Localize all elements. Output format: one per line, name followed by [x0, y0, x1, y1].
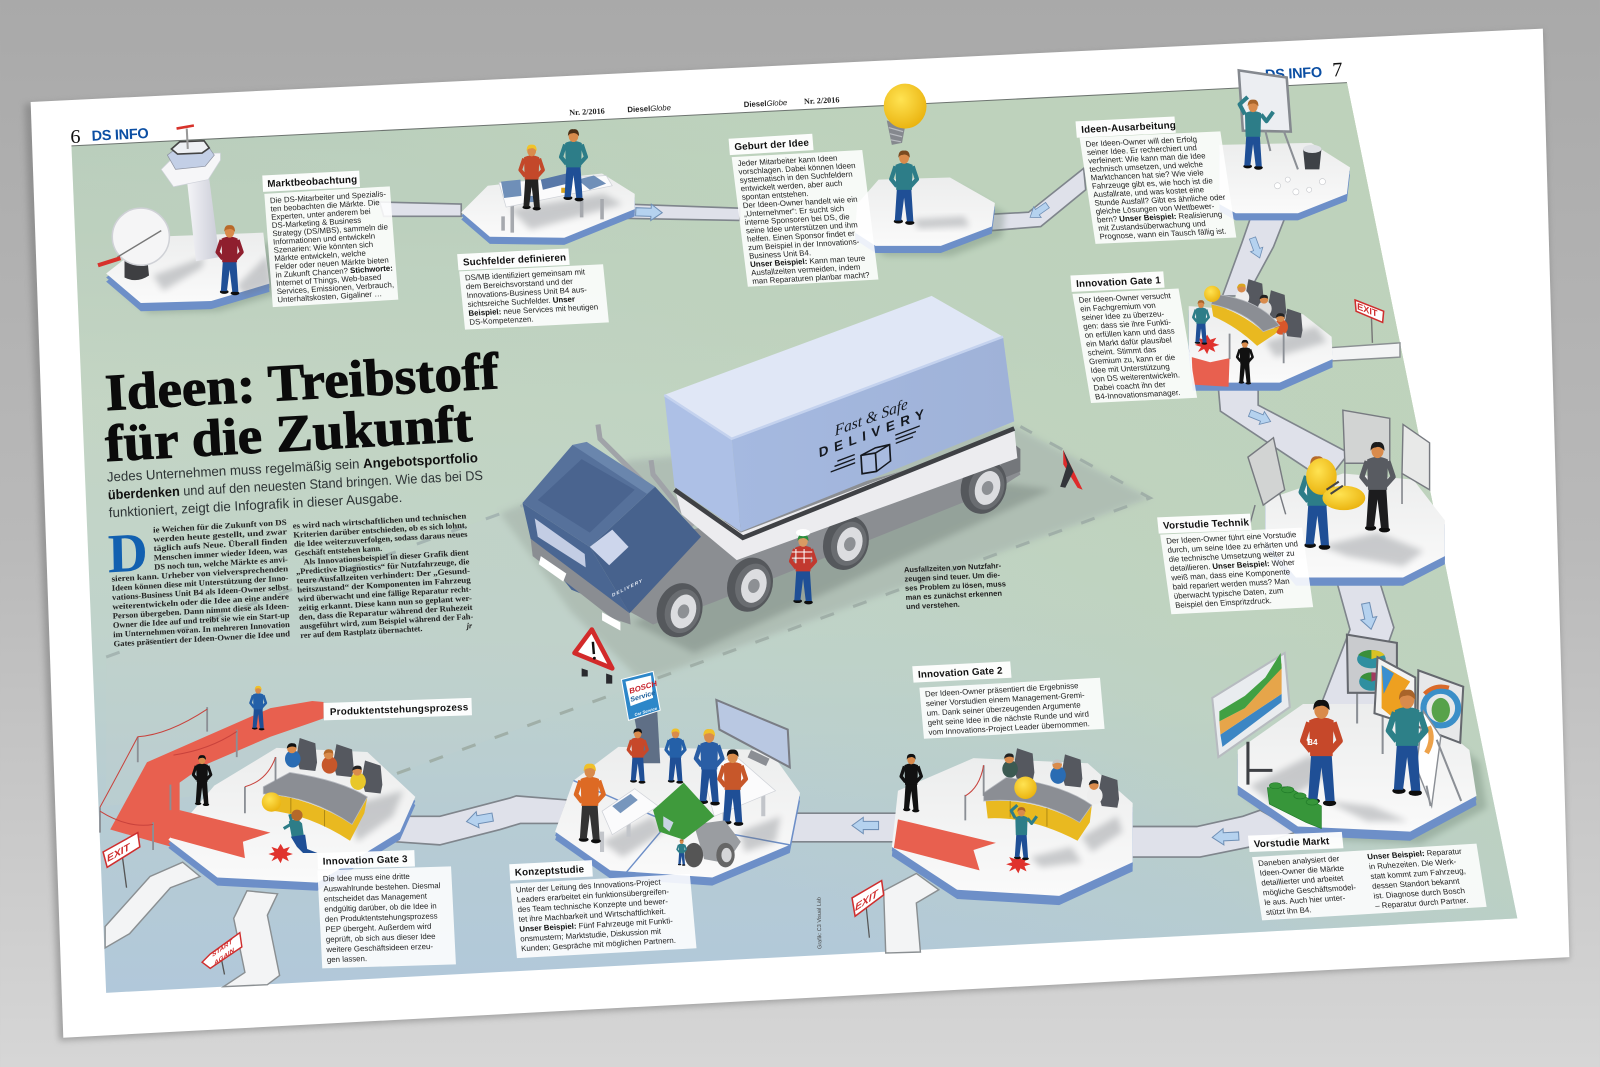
wheels	[650, 454, 1014, 643]
text block: Innovation Gate 1: scheint. Stimmt das	[1087, 345, 1157, 357]
text block: Konzeptstudie: tet ihre Machbarkeit und Wirtschaftlichkeit.	[518, 907, 666, 924]
page header right	[744, 59, 1343, 109]
road: Vorstudie Technik to Markt	[1320, 582, 1394, 706]
concept team	[576, 728, 746, 843]
platform: Vorstudie Markt	[1238, 704, 1487, 844]
text block: Marktbeobachtung: Die DS-Mitarbeiter und Spezialis-	[270, 189, 387, 205]
cargo box	[664, 296, 1014, 532]
text block: Ideen-Ausarbeitung: technisch umsetzen, und welche	[1089, 160, 1204, 174]
text block: Marktbeobachtung: in Zukunft Chancen? Stichworte:	[275, 264, 393, 280]
road: Gate 1 exit	[1327, 343, 1400, 361]
boards Vorstudie Technik	[1248, 410, 1430, 528]
road: Gate 3 exit	[105, 862, 200, 948]
start again sign: AGAIN	[214, 947, 234, 967]
text block: Innovation Gate 1: Dabei coacht ihn der	[1093, 380, 1167, 393]
text block: Ideen-Ausarbeitung: Ausfallrate, und was kostet eine	[1093, 185, 1205, 199]
person on carpet	[250, 686, 266, 730]
platform: Geburt der Idee	[855, 178, 1005, 256]
text block: Marktbeobachtung: Services, Emissionen, Verbrauch,	[276, 280, 394, 296]
text block: Marktbeobachtung: Marktbeobachtung	[267, 175, 358, 190]
text block: Vorstudie Technik: durch, um seine Idee zu erhärten und	[1167, 539, 1299, 555]
text block: Geburt der Idee: Unser Beispiel: Kann man teure	[750, 254, 866, 269]
exit sign Gate 3	[103, 833, 140, 888]
platform: Vorstudie Technik	[1265, 473, 1445, 586]
owner with bulb Gate 2	[1006, 777, 1037, 873]
article column 1: ie Weichen für die Zukunft von DS	[153, 518, 287, 535]
text block: Marktbeobachtung: ten beobachten die Märkte. Die	[270, 198, 381, 214]
kneeling owner with bulb	[262, 792, 317, 863]
page header right: Nr. 2/2016	[804, 95, 840, 106]
text block: Vorstudie Markt	[1248, 832, 1487, 920]
text block: Geburt der Idee: spontan entstehen.	[741, 189, 809, 202]
subheading	[107, 450, 484, 520]
caption near truck: zeugen sind teuer. Um die-	[904, 570, 1001, 584]
text block: Marktbeobachtung: Experten, unter anderem bei	[271, 207, 371, 222]
text block: Innovation Gate 3: gen lassen.	[327, 954, 367, 964]
subheading: überdenken und auf den neuesten Stand bringen. Wie das bei DS	[107, 468, 483, 502]
article column 2: teure Ausfallzeiten verhindert: Der „Gesund-	[296, 566, 471, 585]
start again sign: START	[212, 938, 233, 959]
text block: Innovation Gate 1	[1070, 271, 1197, 403]
text block: Ideen-Ausarbeitung: Prognose, wann ein Tausch fällig ist.	[1099, 227, 1227, 241]
article column 2: ausgeführt wird, zum Beispiel während der Fah-	[299, 612, 474, 631]
light bulb	[884, 84, 927, 145]
white skirt	[674, 429, 1017, 560]
caption near truck	[904, 561, 1007, 611]
text block: Marktbeobachtung: DS-Marketing & Business	[271, 216, 362, 230]
article column 2: rer auf dem Rastplatz übernachtet.	[300, 624, 423, 640]
caption near truck: Ausfallzeiten von Nutzfahr-	[904, 561, 1002, 574]
text block: Ideen-Ausarbeitung: Marktchancen hat sie? Wie viele	[1090, 168, 1205, 182]
page header left: 6	[70, 126, 81, 148]
text block: Vorstudie Technik: Vorstudie Technik	[1163, 517, 1250, 532]
truck shadow	[633, 480, 1051, 653]
text block: Geburt der Idee	[729, 134, 878, 287]
platform: Suchfelder	[461, 173, 635, 245]
text block: Konzeptstudie	[509, 860, 697, 958]
article column 2: es wird nach wirtschaftlichen und technischen	[292, 511, 467, 531]
text block: Suchfelder definieren: dem Bereichsvorstand und der	[465, 277, 574, 291]
text block: Geburt der Idee: Business Unit B4.	[749, 248, 812, 261]
text block: Innovation Gate 3: weitere Geschäftsideen erzeu-	[325, 942, 434, 954]
text block: Vorstudie Markt: dessen Standort bekannt	[1371, 877, 1461, 891]
cab	[522, 442, 701, 631]
label: Produktentstehungsprozess	[323, 698, 472, 720]
article column 2: zeitig erkannt. Diese kann nun so geplant wer-	[298, 594, 473, 613]
article column 2: „Predictive Diagnostics“ für Nutzfahrzeuge, die	[296, 557, 470, 576]
label: Produktentstehungsprozess: Produktentstehungsprozess	[330, 702, 469, 718]
road: Gate 3 start again	[223, 891, 280, 987]
page header left: Nr. 2/2016	[569, 107, 605, 117]
text block: Suchfelder definieren	[457, 249, 609, 330]
platform: Marktbeobachtung	[106, 233, 278, 313]
text block: Innovation Gate 1: seiner Idee zu überzeu-	[1081, 309, 1165, 322]
article column 2: Kriterien darüber entschieden, ob es sich lohnt,	[293, 521, 467, 540]
text block: Geburt der Idee: Der Ideen-Owner handelt wie ein	[742, 195, 858, 210]
text block: Vorstudie Technik: die technische Umsetzung weiter zu	[1168, 549, 1295, 564]
article column 1: vations-Business Unit B4 als Ideen-Owner selbst	[112, 583, 289, 602]
person DS/MB	[561, 129, 586, 201]
ground lot under truck	[106, 427, 1150, 806]
exit sign Gate 2	[852, 881, 884, 938]
table with vehicle models	[499, 173, 612, 233]
article column 1	[110, 518, 291, 649]
text block: Geburt der Idee: systematisch in den Suchfeldern	[739, 170, 853, 185]
text block: Innovation Gate 1: ein Markt dafür plausibel	[1085, 335, 1173, 349]
text block: Suchfelder definieren: DS-Kompetenzen.	[469, 315, 534, 327]
text block: Geburt der Idee: vorschlagen. Dabei können Ideen	[738, 161, 856, 176]
text block: Ideen-Ausarbeitung: seiner Idee. Er recherchiert und	[1086, 143, 1197, 157]
truck	[522, 296, 1051, 653]
illustration background	[71, 83, 1517, 993]
posts and ropes Gate 3	[100, 707, 276, 850]
title: für die Zukunft	[104, 396, 474, 473]
text block: Geburt der Idee: Geburt der Idee	[734, 138, 810, 153]
article column 1: Ideen können diese mit Unterstützung der Inno-	[112, 574, 289, 593]
text block: Marktbeobachtung: Strategy (DS/MBS), sammeln die	[272, 222, 389, 238]
person at flipchart	[1240, 97, 1273, 170]
text block: Marktbeobachtung: Märkte entwickeln, welche	[274, 249, 367, 263]
mechanic	[791, 529, 815, 604]
Bosch Service sign: Car Service	[634, 705, 658, 717]
road: Ausarbeitung to Gate 1	[1222, 216, 1285, 296]
caption near truck: man es zunächst erkennen	[905, 589, 1003, 602]
page header right: DS INFO	[1265, 65, 1323, 84]
text block: Vorstudie Markt: stützt ihn B4.	[1265, 905, 1312, 917]
text block: Vorstudie Technik: bald repariert werden muss? Man	[1172, 577, 1290, 592]
page header left	[70, 103, 672, 148]
road: Marktbeobachtung to Suchfelder	[380, 202, 461, 216]
text block: Ideen-Ausarbeitung	[1075, 116, 1236, 244]
article column 1: DS noch tun, welche Märkte es anvi-	[154, 555, 288, 572]
thinking person	[891, 151, 917, 225]
person at easel	[1389, 690, 1425, 796]
exit sign Gate 1: EXIT	[1357, 301, 1378, 320]
text block: Ideen-Ausarbeitung: Stunde Ausfall? Gibt es ähnliche oder	[1094, 193, 1226, 208]
person B4	[520, 145, 543, 210]
Bosch Service sign	[621, 671, 660, 763]
title: Ideen: Treibstoff	[104, 343, 501, 422]
platform: Innovation Gate 3	[168, 748, 415, 891]
text block: Geburt der Idee: seine Idee unterstützen und ihm	[745, 220, 859, 235]
text block: Ideen-Ausarbeitung: bern? Unser Beispiel: Realisierung	[1096, 210, 1223, 224]
text block: Ideen-Ausarbeitung: Fahrzeuge gibt es, wie hoch ist die	[1091, 176, 1214, 191]
text block: Vorstudie Markt: mögliche Geschäftsmodel-	[1262, 883, 1357, 897]
tables and monitor	[602, 700, 790, 852]
text block: Marktbeobachtung: Szenarien: Wie könnten sich	[273, 240, 373, 255]
delivery logo	[817, 388, 932, 492]
manager Gate 1	[1230, 333, 1284, 385]
satellite dish	[98, 208, 169, 280]
text block: Suchfelder definieren: Innovations-Business Unit B4 aus-	[466, 285, 588, 300]
text block: Innovation Gate 3: den Produktentstehungsprozess	[325, 911, 438, 924]
text block: Innovation Gate 3	[317, 850, 456, 968]
text block: Innovation Gate 3: Innovation Gate 3	[323, 854, 408, 868]
text block: Innovation Gate 1: von DS weiterentwickeln.	[1091, 370, 1181, 384]
text block: Ideen-Ausarbeitung: verfeinert: Wie kann man die Idee	[1088, 151, 1207, 166]
text block: Suchfelder definieren: Suchfelder definieren	[463, 252, 567, 269]
platform: Innovation Gate 1 red arrow	[1192, 357, 1230, 387]
text block: Geburt der Idee: helfen. Einen Sponsor findet er	[746, 229, 856, 244]
text block: Innovation Gate 3: entscheidet das Management	[324, 892, 428, 904]
text block: Konzeptstudie: onsmustern; Marktstudie, Diskussion mit	[520, 927, 662, 944]
article column 1: Person übergeben. Dann nimmt diese als Ideen-	[113, 601, 290, 621]
person with bulb Gate 1	[1193, 286, 1220, 354]
caption near truck: ses Problem zu lösen, muss	[905, 579, 1006, 593]
text block: Vorstudie Markt: Vorstudie Markt	[1253, 836, 1331, 850]
text block: Geburt der Idee: „Unternehmer“: Er sucht sich	[743, 204, 845, 219]
article column 2: die Idee weiterzuverfolgen, sodass daraus neues	[294, 530, 468, 549]
text block: Innovation Gate 3: PEP übergeht. Außerdem wird	[325, 922, 432, 934]
desk Gate 3	[263, 738, 382, 841]
article column 2: wird überwacht und eine fällige Reparatur recht-	[298, 585, 472, 604]
text block: Innovation Gate 1: ein Fachgremium von	[1079, 301, 1156, 314]
manager Gate 3	[193, 755, 211, 806]
text block: Konzeptstudie: Unter der Leitung des Innovations-Project	[516, 878, 662, 895]
text block: Innovation Gate 3: Auswahlrunde bestehen. Diesmal	[323, 881, 441, 894]
road: Markt to Gate 2	[1128, 810, 1298, 857]
page header left: DieselGlobe	[627, 103, 672, 114]
article column 1: werden heute gestellt, und zwar	[153, 527, 288, 544]
text block: Vorstudie Markt: ist. Diagnose durch Bosch	[1373, 886, 1466, 901]
text block: Vorstudie Markt: le aus. Auch hier unter-	[1264, 893, 1346, 907]
text block: Vorstudie Markt: statt kommt zum Fahrzeug,	[1370, 866, 1466, 881]
text block: Innovation Gate 1: Idee mit Unterstützung	[1090, 362, 1170, 375]
text block: Innovation Gate 2: seiner Vorstudien einem Management-Gremi-	[926, 691, 1085, 708]
start again sign	[202, 933, 242, 974]
text block: Vorstudie Technik: Beispiel den Einspritzdruck.	[1175, 596, 1272, 610]
text block: Marktbeobachtung	[262, 171, 398, 307]
text block: Suchfelder definieren: Beispiel: neue Services mit heutigen	[468, 302, 599, 318]
person B4: B4	[1307, 738, 1318, 747]
cab: DELIVERY	[612, 578, 643, 599]
text block: Innovation Gate 2	[912, 661, 1105, 739]
text block: Innovation Gate 3: endgültig darüber, ob die Idee in	[324, 901, 437, 914]
owner with opened bulb	[1301, 456, 1365, 550]
article column 2: jr	[464, 621, 473, 631]
projector screen	[1212, 653, 1290, 785]
text block: Innovation Gate 1: Innovation Gate 1	[1076, 275, 1162, 290]
text block: Ideen-Ausarbeitung: Ideen-Ausarbeitung	[1081, 120, 1176, 136]
subheading: funktioniert, zeigt die Infografik in dieser Ausgabe.	[108, 490, 403, 520]
road: Geburt to Ausarbeitung	[990, 168, 1086, 231]
page header left: DS INFO	[91, 126, 149, 145]
text block: Innovation Gate 3: geprüft, ob sich aus dieser Idee	[326, 932, 436, 944]
text block: Marktbeobachtung: Informationen und entwickeln	[273, 231, 375, 247]
article column 2: heitszustand“ der Komponenten im Fahrzeug	[297, 575, 471, 594]
text block: Vorstudie Markt: Daneben analysiert der	[1257, 854, 1340, 868]
platform: Innovation Gate 2	[892, 758, 1133, 905]
platform: Ideen-Ausarbeitung	[1219, 143, 1350, 220]
delivery logo: DELIVERY	[818, 404, 930, 460]
text block: Ideen-Ausarbeitung: gleiche Lösungen von Wettbewer-	[1095, 202, 1215, 216]
text block: Vorstudie Technik: detaillieren. Unser Beispiel: Woher	[1169, 558, 1295, 573]
chassis	[612, 441, 1020, 624]
text block: Innovation Gate 1: gen: dass sie ihre Funkti-	[1082, 318, 1172, 331]
text block: Innovation Gate 2: vom Innovations-Project Leader übernommen.	[928, 719, 1090, 737]
text block: Innovation Gate 1: B4-Innovationsmanager.	[1094, 388, 1181, 401]
article column 2	[292, 511, 475, 640]
text block: Vorstudie Markt: Ideen-Owner die Märkte	[1259, 864, 1345, 878]
article column 2: den, dass die Reparatur während der Ruhezeit	[299, 603, 473, 622]
text block: Konzeptstudie: Leaders erarbeitet ein funktionsübergreifen-	[516, 887, 670, 904]
caption near truck: und verstehen.	[906, 600, 960, 611]
text block: Innovation Gate 1: Der Ideen-Owner versucht	[1078, 291, 1172, 305]
warning triangle from behind	[1060, 450, 1083, 490]
text block: Geburt der Idee: Ausfallzeiten vermeiden, indem	[751, 262, 861, 277]
green truck model	[653, 783, 741, 867]
text block: Vorstudie Technik: weiß man, dass eine Komponente	[1170, 567, 1291, 582]
text block: Geburt der Idee: zum Beispiel in der Innovations-	[748, 237, 860, 252]
text block: Geburt der Idee: interne Sponsoren bei DS, die	[744, 212, 851, 227]
text block: Geburt der Idee: Jeder Mitarbeiter kann Ideen	[737, 154, 838, 168]
waste bin and paper	[1274, 145, 1325, 195]
text block: Geburt der Idee: man Reparaturen planbar macht?	[752, 270, 871, 286]
text block: Ideen-Ausarbeitung: Der Ideen-Owner will den Erfolg	[1085, 135, 1198, 149]
text block: Suchfelder definieren: DS/MB identifiziert gemeinsam mit	[465, 267, 586, 282]
text block: Innovation Gate 2: Der Ideen-Owner präsentiert die Ergebnisse	[925, 681, 1079, 699]
exit sign Gate 1	[1355, 300, 1384, 343]
text block: Vorstudie Technik: überwacht typische Daten, zum	[1173, 586, 1284, 601]
article column 1: täglich aufs Neue. Überall finden	[153, 536, 288, 553]
flipchart	[1239, 70, 1298, 169]
person B4	[1303, 700, 1340, 806]
man in suit	[1362, 442, 1393, 532]
article column 1: Gates präsentiert der Ideen-Owner die Idee und	[113, 629, 291, 649]
text block: Innovation Gate 2: Innovation Gate 2	[918, 666, 1004, 681]
exit sign Gate 2: EXIT	[855, 887, 879, 914]
person with camera	[217, 225, 242, 295]
exhaust pipes	[598, 424, 694, 525]
text block: Innovation Gate 1: on erfüllen kann und dass	[1084, 326, 1175, 340]
text block: Vorstudie Markt: – Reparatur durch Partner.	[1374, 896, 1469, 910]
road: Gate 1 to Vorstudie Technik	[1218, 388, 1349, 482]
text block: Innovation Gate 3: Die Idee muss eine dritte	[323, 872, 411, 883]
text block: Vorstudie Markt: detaillierter und arbeitet	[1261, 874, 1345, 888]
page header right: DieselGlobe	[744, 98, 788, 109]
Bosch Service sign: Service	[630, 689, 656, 704]
subheading: Jedes Unternehmen muss regelmäßig sein Angebotsportfolio	[107, 450, 478, 485]
manager Gate 2	[901, 754, 984, 820]
text block: Konzeptstudie: des Team technische Konzepte und bewer-	[517, 897, 669, 914]
text block: Marktbeobachtung: Unterhaltskosten, Gigaliner …	[277, 289, 382, 304]
warning triangle	[574, 630, 612, 684]
Bosch Service sign: BOSCH	[629, 679, 658, 696]
control tower	[161, 126, 220, 261]
article column 1: sieren kann. Urheber von vielversprechenden	[111, 564, 289, 584]
drop cap: D	[107, 521, 148, 584]
desk Gate 2	[984, 748, 1119, 841]
credit: Grafik: C3 Visual Lab	[817, 897, 823, 949]
exit sign Gate 3: EXIT	[107, 841, 130, 865]
delivery logo: Fast & Safe	[833, 396, 908, 440]
text block: Vorstudie Markt: Unser Beispiel: Reparatur	[1367, 847, 1462, 861]
red carpet Gate 3	[110, 701, 323, 847]
platform: Konzeptstudie	[555, 747, 800, 886]
chart boards Markt	[1347, 635, 1463, 806]
green stacks	[1267, 783, 1321, 829]
text block: Innovation Gate 1: Gremium zu, kann er die	[1088, 353, 1176, 366]
text block: Vorstudie Technik: Der Ideen-Owner führt eine Vorstudie	[1166, 530, 1297, 546]
article column 1: im Unternehmen voran. In mehreren Innovation	[113, 620, 290, 639]
article column 1: Owner die Idee auf und treibt sie wie ein Start-up	[113, 611, 290, 630]
text block: Konzeptstudie: Konzeptstudie	[515, 864, 585, 879]
text block: Vorstudie Markt: in Ruhezeiten. Die Werk-	[1368, 857, 1457, 871]
text block: Vorstudie Technik	[1157, 514, 1313, 614]
text block: Marktbeobachtung: Felder oder neuen Märkte bieten	[275, 256, 389, 271]
panel desk Gate 1	[1211, 279, 1303, 346]
road: Gate 2 to Konzeptstudie	[791, 813, 902, 842]
text block: Innovation Gate 2: um. Dank seiner überzeugenden Argumente	[926, 700, 1082, 718]
title	[104, 343, 501, 473]
text block: Geburt der Idee: entwickelt werden, aber auch	[740, 179, 843, 193]
text block: Marktbeobachtung: Internet of Things, Web-based	[276, 273, 382, 288]
text block: Innovation Gate 2: geht seine Idee in die nächste Runde und wird	[927, 710, 1089, 727]
article column 2: Geschäft entstehen kann.	[294, 544, 382, 558]
page header right: 7	[1332, 59, 1343, 82]
article column 2: Als Innovationsbeispiel in dieser Grafik dient	[303, 548, 469, 567]
text block: Suchfelder definieren: sichtsreiche Suchfelder. Unser	[467, 295, 575, 309]
road: Suchfelder to Geburt der Idee	[624, 204, 740, 221]
road: Konzeptstudie to Gate 3	[396, 796, 567, 845]
text block: Ideen-Ausarbeitung: mit Zustandsüberwachung und	[1098, 219, 1206, 233]
text block: Konzeptstudie: Unser Beispiel: Fünf Fahrzeuge mit Funkti-	[519, 916, 673, 934]
article column 1: Menschen immer wieder Ideen, was	[154, 546, 288, 562]
road: Gate 2 exit	[884, 873, 939, 953]
platform: Innovation Gate 1	[1189, 306, 1333, 391]
text block: Konzeptstudie: Kunden; Gespräche mit möglichen Partnern.	[521, 936, 676, 953]
article column 1: weiterentwickeln oder die Idee an eine andere	[112, 592, 289, 611]
